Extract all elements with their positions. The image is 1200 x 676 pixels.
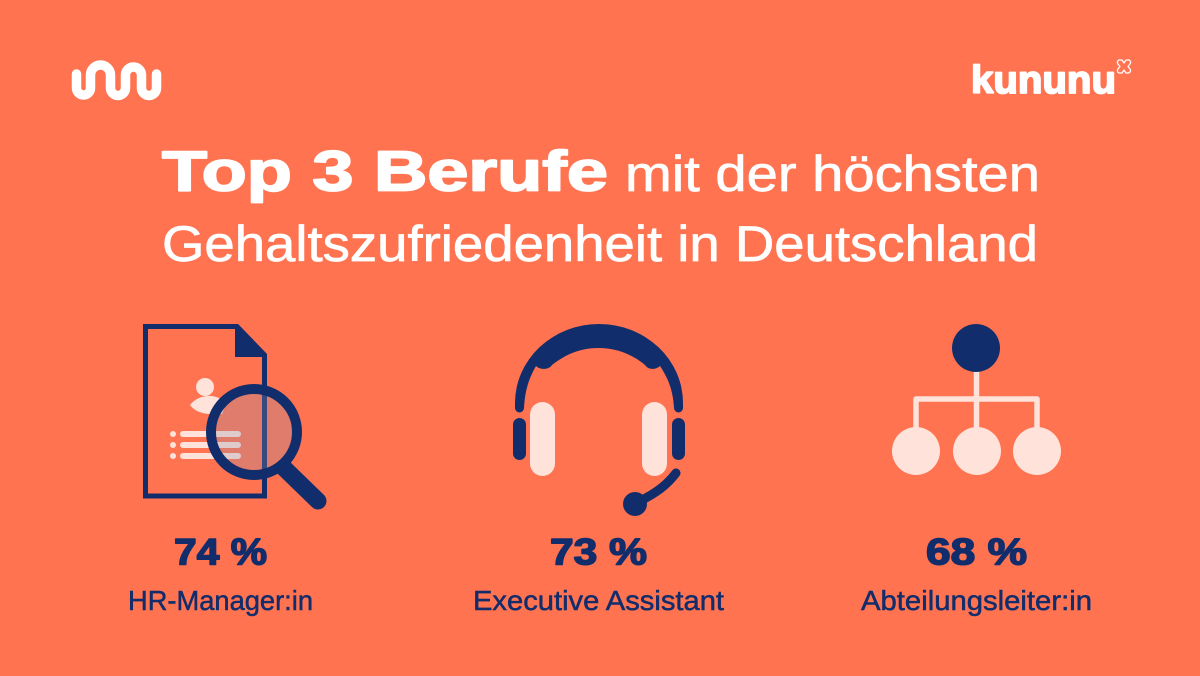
icon: document with magnifier	[146, 326, 318, 501]
value: 74 %	[174, 532, 267, 572]
connectors	[916, 370, 1037, 435]
lens	[216, 394, 292, 470]
label: Abteilungsleiter:in	[861, 585, 1092, 616]
headband	[515, 324, 683, 412]
label: HR-Manager:in	[128, 585, 313, 616]
title line 2: Gehaltszufriedenheit in Deutschland	[162, 216, 1038, 272]
title	[162, 140, 1040, 272]
stat: HR-Manager	[128, 532, 313, 616]
person	[190, 378, 226, 414]
microphone	[623, 492, 647, 516]
value: 73 %	[550, 532, 647, 572]
icon: wave logo	[76, 65, 156, 96]
lower nodes	[892, 427, 1061, 475]
title line 1 bold: Top 3 Berufe	[162, 140, 608, 204]
kununu logo: kununu	[971, 59, 1116, 102]
stat: Abteilungsleiter	[861, 532, 1092, 616]
document outline	[146, 326, 264, 496]
handle	[284, 468, 318, 501]
label: Executive Assistant	[473, 585, 724, 616]
icon: headset	[513, 324, 685, 516]
stat: Executive Assistant	[473, 532, 724, 616]
lens ring	[211, 389, 297, 475]
title line 1 regular: mit der höchsten	[625, 146, 1040, 202]
list lines	[170, 431, 241, 459]
icon: org chart	[892, 324, 1061, 475]
value: 68 %	[926, 532, 1027, 572]
icon: kununu mark	[1117, 60, 1131, 73]
top node	[952, 324, 1000, 372]
ear caps	[513, 418, 526, 460]
ear pads	[530, 402, 555, 476]
document fold	[235, 328, 267, 357]
